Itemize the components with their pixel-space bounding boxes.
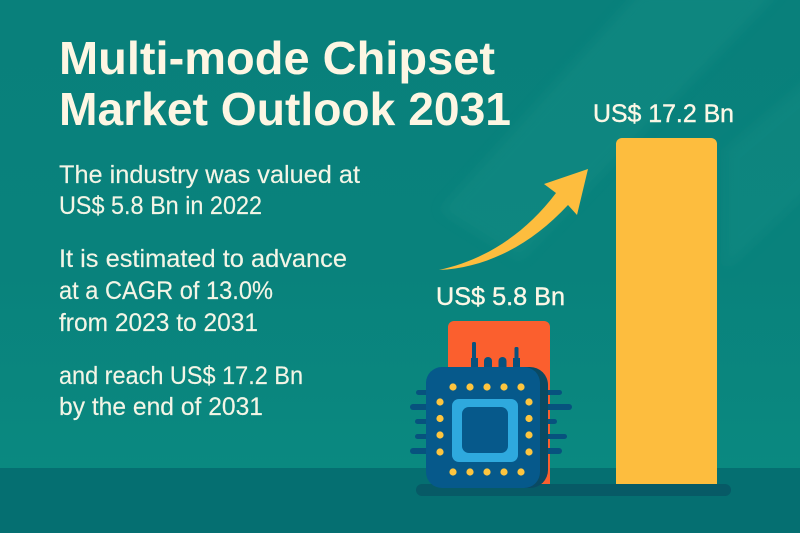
text block: 2031 forecast: and reach US$ 17.2 Bn <box>59 362 303 390</box>
label: 2031 value: US$ 17.2 Bn <box>593 100 734 128</box>
arrow: growth <box>439 169 588 270</box>
bar: 2031 value <box>616 138 717 484</box>
text block: 2022 valuation: US$ 5.8 Bn in 2022 <box>59 192 262 220</box>
text block: 2022 valuation <box>59 161 360 220</box>
text block: CAGR: It is estimated to advance <box>59 245 347 273</box>
text block: CAGR: at a CAGR of 13.0% <box>59 277 273 305</box>
text block: CAGR: from 2023 to 2031 <box>59 309 258 337</box>
ground band <box>0 468 800 533</box>
chip pins <box>410 342 572 454</box>
chip body <box>426 367 540 488</box>
title: Multi-mode Chipset <box>59 32 495 84</box>
chip core outer <box>452 399 518 462</box>
chip core inner <box>462 407 508 453</box>
text block: CAGR <box>59 245 347 337</box>
icon: chipset <box>410 342 572 488</box>
chip shadow side <box>440 367 548 488</box>
title <box>59 32 511 135</box>
text block: 2031 forecast: by the end of 2031 <box>59 393 263 421</box>
title: Market Outlook 2031 <box>59 83 511 135</box>
bar: 2022 value <box>448 321 550 484</box>
chip contact dots <box>436 383 533 476</box>
bar baseline shadow <box>416 484 731 496</box>
text block: 2022 valuation: The industry was valued at <box>59 161 360 189</box>
label: 2022 value: US$ 5.8 Bn <box>436 283 565 311</box>
text block: 2031 forecast <box>59 362 303 421</box>
